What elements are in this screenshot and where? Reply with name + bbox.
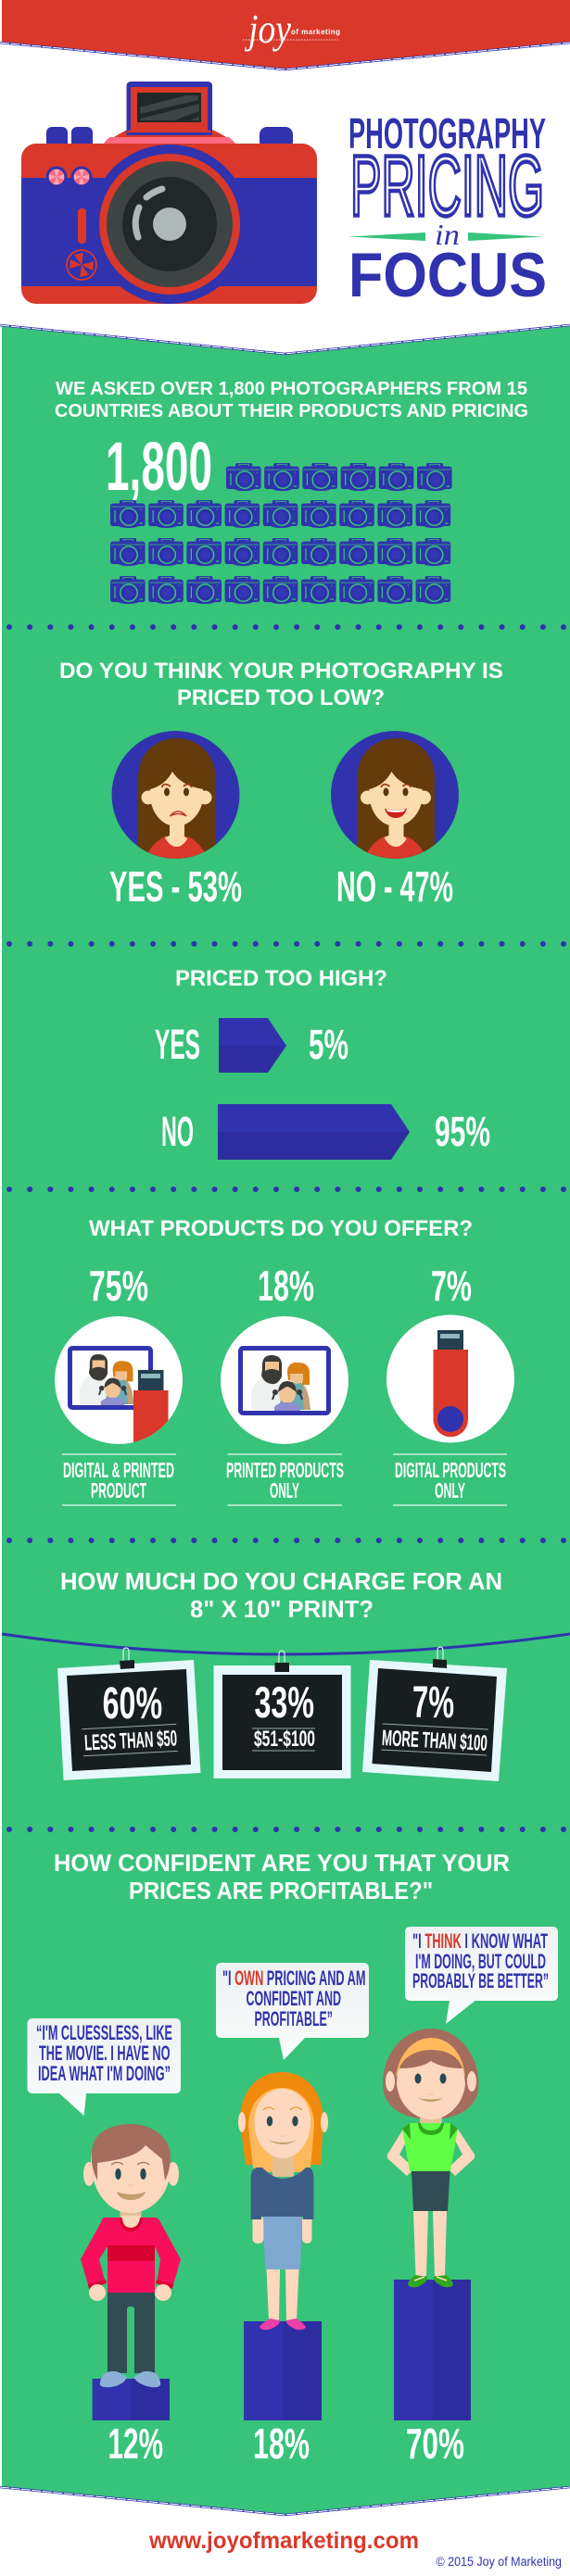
- heading: survey intro: [55, 378, 528, 421]
- photo: 7% more than $100: 7%: [412, 1678, 454, 1728]
- stat: 12%: 12%: [108, 2419, 163, 2468]
- pedestal: 12%: [93, 2379, 170, 2420]
- bar: no 95%: 95%: [435, 1108, 490, 1155]
- footer url: www.joyofmarketing.com: [148, 2528, 419, 2554]
- heading: print charge: [60, 1569, 502, 1623]
- icon: happy woman: [331, 731, 459, 861]
- product: printed only: PRINTED PRODUCTS: [226, 1458, 344, 1482]
- photo: 33% $51-$100: [213, 1651, 350, 1778]
- character: woman in blue top: [238, 2072, 328, 2330]
- product: digital and printed: [55, 1262, 183, 1505]
- footer white area: [0, 2487, 570, 2576]
- product: digital only: [386, 1262, 514, 1505]
- speech bubble: clueless: IDEA WHAT I'M DOING”: [38, 2062, 171, 2085]
- photo: 60% less than $50: LESS THAN $50: [83, 1726, 178, 1756]
- logo: joy of marketing: joy: [245, 6, 291, 52]
- heading: products: WHAT PRODUCTS DO YOU OFFER?: [89, 1216, 473, 1241]
- speech bubble: clueless: [28, 2018, 181, 2116]
- photo: 33% $51-$100: $51-$100: [254, 1727, 315, 1752]
- title: Photography Pricing in Focus: FOCUS: [348, 240, 547, 310]
- bar: no 95%: [161, 1104, 490, 1160]
- stat: yes 53%: YES - 53%: [109, 862, 242, 911]
- logo: joy of marketing: [243, 6, 340, 52]
- stat: 1,800: 1,800: [106, 428, 212, 505]
- speech bubble: own pricing: CONFIDENT AND: [247, 1987, 341, 2010]
- heading: priced too low: PRICED TOO LOW?: [177, 685, 385, 710]
- icon: red and blue camera: [21, 82, 317, 304]
- pedestal: 70%: [394, 2280, 471, 2420]
- heading: confidence: HOW CONFIDENT ARE YOU THAT YOUR: [54, 1851, 510, 1877]
- bar: yes 5%: 5%: [309, 1021, 348, 1068]
- heading: survey intro: WE ASKED OVER 1,800 PHOTOGRAPHERS FROM 15: [56, 378, 527, 399]
- speech bubble: clueless: THE MOVIE. I HAVE NO: [39, 2042, 171, 2065]
- icon: sad woman: [111, 731, 239, 861]
- white header panel: [0, 28, 570, 354]
- product: digital only: ONLY: [435, 1478, 465, 1502]
- bar: yes 5%: [155, 1018, 348, 1073]
- product: digital and printed: DIGITAL & PRINTED: [63, 1458, 174, 1482]
- product: digital only: 7%: [431, 1262, 472, 1310]
- speech bubble: think I know: [405, 1927, 558, 2024]
- pedestal: 18%: [244, 2321, 322, 2420]
- product: digital and printed: 75%: [89, 1262, 148, 1310]
- heading: priced too low: [59, 659, 503, 710]
- bar: yes 5%: YES: [155, 1021, 200, 1068]
- bar: no 95%: NO: [161, 1108, 194, 1155]
- character: boy in red sweater: [81, 2124, 181, 2387]
- photo: 33% $51-$100: 33%: [254, 1678, 314, 1727]
- speech bubble: own pricing: "I OWN PRICING AND AM: [222, 1967, 365, 1990]
- heading: confidence: PRICES ARE PROFITABLE?": [129, 1879, 433, 1904]
- icon grid: cameras: [110, 463, 452, 604]
- product: printed only: [221, 1262, 348, 1505]
- photo: 7% more than $100: [362, 1647, 507, 1781]
- red header ribbon: [2, 0, 570, 69]
- stat: 18%: 18%: [253, 2419, 310, 2468]
- heading: confidence: [54, 1851, 510, 1904]
- product: digital and printed: PRODUCT: [91, 1478, 146, 1502]
- stat: no 47%: NO - 47%: [336, 862, 453, 911]
- logo: joy of marketing: of marketing: [291, 28, 340, 36]
- speech bubble: clueless: “I'M CLUESSLESS, LIKE: [36, 2021, 172, 2044]
- heading: priced too high: PRICED TOO HIGH?: [175, 966, 387, 991]
- heading: survey intro: COUNTRIES ABOUT THEIR PRODUCTS AND PRICING: [55, 400, 528, 421]
- title: Photography Pricing in Focus: in: [435, 218, 460, 251]
- photo: 60% less than $50: 60%: [103, 1679, 162, 1728]
- photo: 60% less than $50: [57, 1648, 200, 1780]
- clothesline wire: [2, 1634, 570, 1654]
- heading: print charge: HOW MUCH DO YOU CHARGE FOR AN: [60, 1569, 502, 1595]
- product: printed only: ONLY: [270, 1478, 299, 1502]
- speech bubble: own pricing: [216, 1963, 369, 2060]
- photo: 7% more than $100: MORE THAN $100: [381, 1726, 488, 1756]
- copyright: © 2015 Joy of Marketing: [436, 2555, 562, 2569]
- stat: 70%: 70%: [406, 2419, 464, 2468]
- product: printed only: 18%: [258, 1262, 314, 1310]
- character: girl in green top: [383, 2029, 478, 2287]
- title: Photography Pricing in Focus: [348, 109, 547, 310]
- heading: priced too low: DO YOU THINK YOUR PHOTOGRAPHY IS: [59, 659, 503, 684]
- speech bubble: own pricing: PROFITABLE”: [254, 2007, 333, 2030]
- heading: print charge: 8" X 10" PRINT?: [190, 1597, 374, 1623]
